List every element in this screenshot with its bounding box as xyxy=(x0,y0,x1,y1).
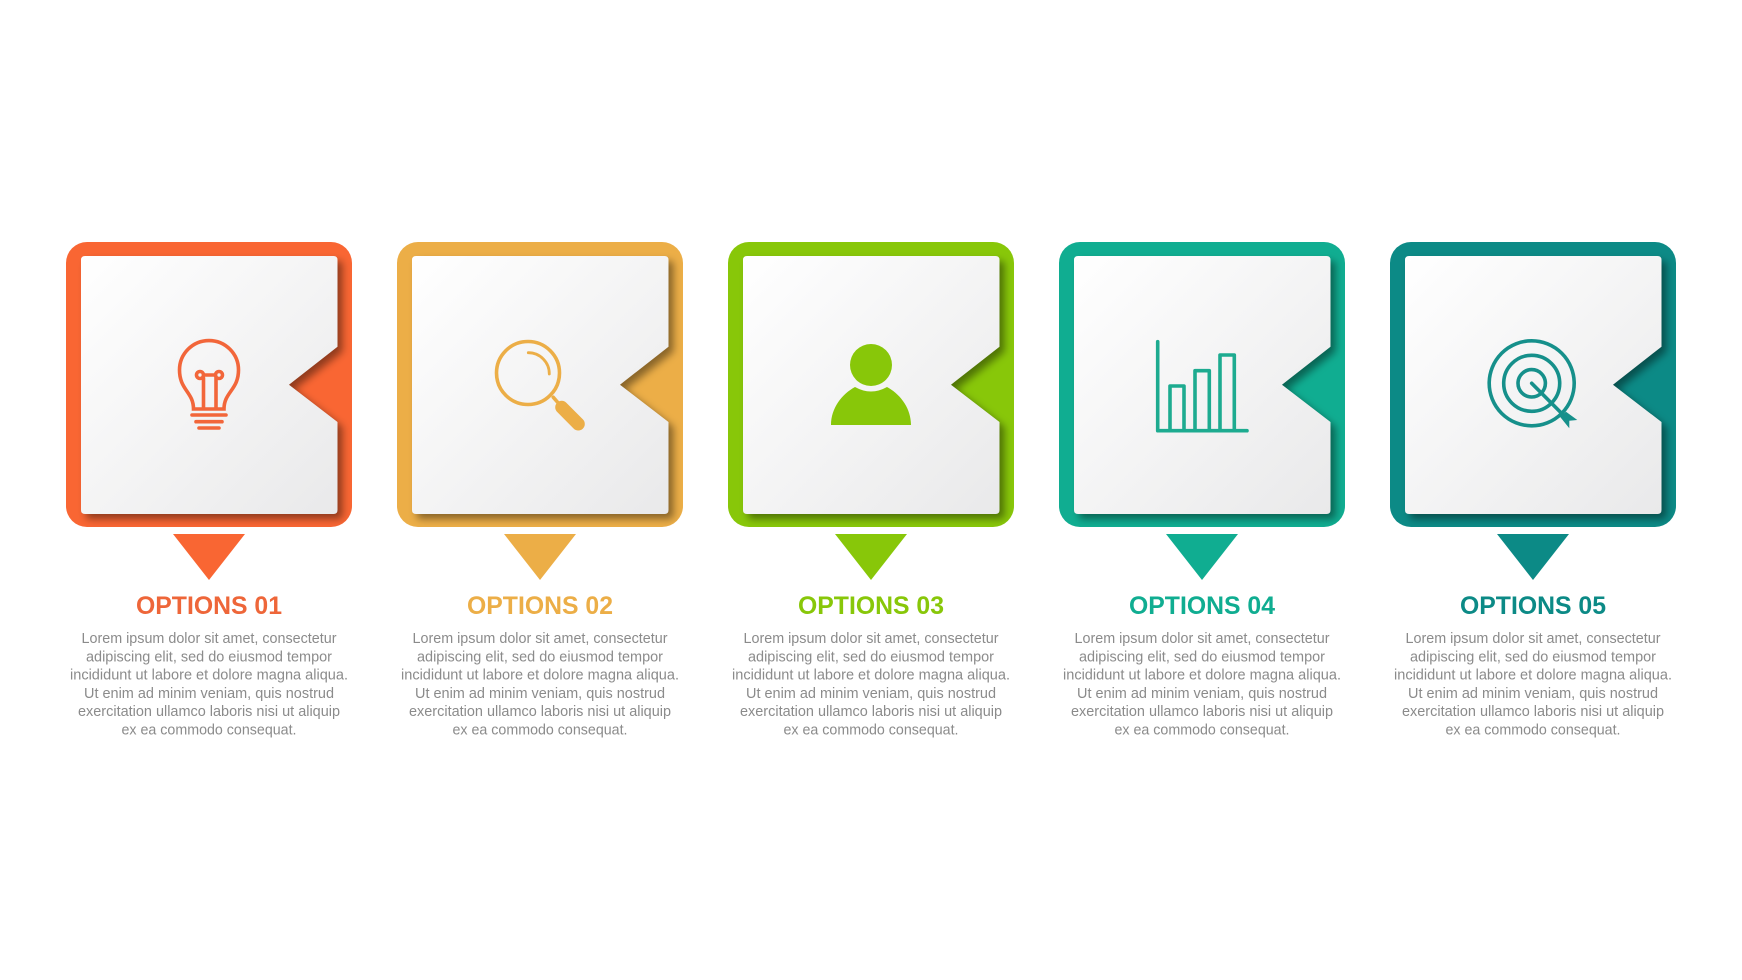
heading: options 01: OPTIONS 01 xyxy=(136,592,282,620)
text block: description 03: Ut enim ad minim veniam, quis nostrud xyxy=(746,686,996,702)
arrow: down triangle 01 xyxy=(173,534,245,580)
panel: options 05 xyxy=(1390,242,1676,738)
text block: description 04 xyxy=(1063,631,1341,738)
card: options 05 frame xyxy=(1390,242,1676,527)
icon: light bulb xyxy=(180,341,238,428)
text block: description 02: Ut enim ad minim veniam, quis nostrud xyxy=(415,686,665,702)
icon: target with arrow xyxy=(1489,341,1577,428)
panel: options 03 xyxy=(728,242,1014,738)
text block: description 01: adipiscing elit, sed do eiusmod tempor xyxy=(86,649,332,665)
heading: options 05: OPTIONS 05 xyxy=(1460,592,1606,620)
arrow: down triangle 02 xyxy=(504,534,576,580)
text block: description 03: adipiscing elit, sed do eiusmod tempor xyxy=(748,649,994,665)
heading: options 02: OPTIONS 02 xyxy=(467,592,613,620)
text block: description 02 xyxy=(401,631,679,738)
text block: description 05 xyxy=(1394,631,1672,738)
card: options 02 frame xyxy=(397,242,683,527)
text block: description 05: ex ea commodo consequat. xyxy=(1446,722,1620,738)
text block: description 03 xyxy=(732,631,1010,738)
heading: options 04: OPTIONS 04 xyxy=(1129,592,1275,620)
card: options 04 frame xyxy=(1059,242,1345,527)
icon: bar chart xyxy=(1158,342,1247,431)
text block: description 05: adipiscing elit, sed do eiusmod tempor xyxy=(1410,649,1656,665)
arrow: down triangle 05 xyxy=(1497,534,1569,580)
text block: description 04: incididunt ut labore et dolore magna aliqua. xyxy=(1063,668,1341,684)
text block: description 04: exercitation ullamco laboris nisi ut aliquip xyxy=(1071,704,1333,720)
text block: description 03: incididunt ut labore et dolore magna aliqua. xyxy=(732,668,1010,684)
heading: options 03: OPTIONS 03 xyxy=(798,592,944,620)
icon: person xyxy=(831,344,911,425)
text block: description 01: exercitation ullamco laboris nisi ut aliquip xyxy=(78,704,340,720)
text block: description 02: ex ea commodo consequat. xyxy=(452,722,628,738)
text block: description 05: Ut enim ad minim veniam, quis nostrud xyxy=(1408,686,1658,702)
text block: description 05: incididunt ut labore et dolore magna aliqua. xyxy=(1394,668,1672,684)
text block: description 02: adipiscing elit, sed do eiusmod tempor xyxy=(417,649,663,665)
arrow: down triangle 04 xyxy=(1166,534,1238,580)
text block: description 01: Ut enim ad minim veniam, quis nostrud xyxy=(84,686,334,702)
card: options 01 frame xyxy=(66,242,352,527)
card: options 03 frame xyxy=(728,242,1014,527)
text block: description 01: incididunt ut labore et dolore magna aliqua. xyxy=(70,668,348,684)
text block: description 03: exercitation ullamco laboris nisi ut aliquip xyxy=(740,704,1002,720)
text block: description 03: Lorem ipsum dolor sit amet, consectetur xyxy=(744,631,999,647)
text block: description 02: Lorem ipsum dolor sit amet, consectetur xyxy=(412,631,668,647)
text block: description 02: incididunt ut labore et dolore magna aliqua. xyxy=(401,668,679,684)
text block: description 04: Ut enim ad minim veniam, quis nostrud xyxy=(1077,686,1327,702)
text block: description 01 xyxy=(70,631,348,738)
icon: magnifying glass xyxy=(496,342,578,424)
text block: description 03: ex ea commodo consequat. xyxy=(784,722,958,738)
panel: options 04 xyxy=(1059,242,1345,738)
panel: options 01 xyxy=(66,242,352,738)
text block: description 05: Lorem ipsum dolor sit amet, consectetur xyxy=(1406,631,1661,647)
text block: description 05: exercitation ullamco laboris nisi ut aliquip xyxy=(1402,704,1664,720)
text block: description 01: Lorem ipsum dolor sit amet, consectetur xyxy=(82,631,337,647)
text block: description 02: exercitation ullamco laboris nisi ut aliquip xyxy=(409,704,671,720)
arrow: down triangle 03 xyxy=(835,534,907,580)
text block: description 04: Lorem ipsum dolor sit amet, consectetur xyxy=(1074,631,1330,647)
panel: options 02 xyxy=(397,242,683,738)
text block: description 04: ex ea commodo consequat. xyxy=(1114,722,1290,738)
text block: description 04: adipiscing elit, sed do eiusmod tempor xyxy=(1079,649,1325,665)
text block: description 01: ex ea commodo consequat. xyxy=(122,722,296,738)
